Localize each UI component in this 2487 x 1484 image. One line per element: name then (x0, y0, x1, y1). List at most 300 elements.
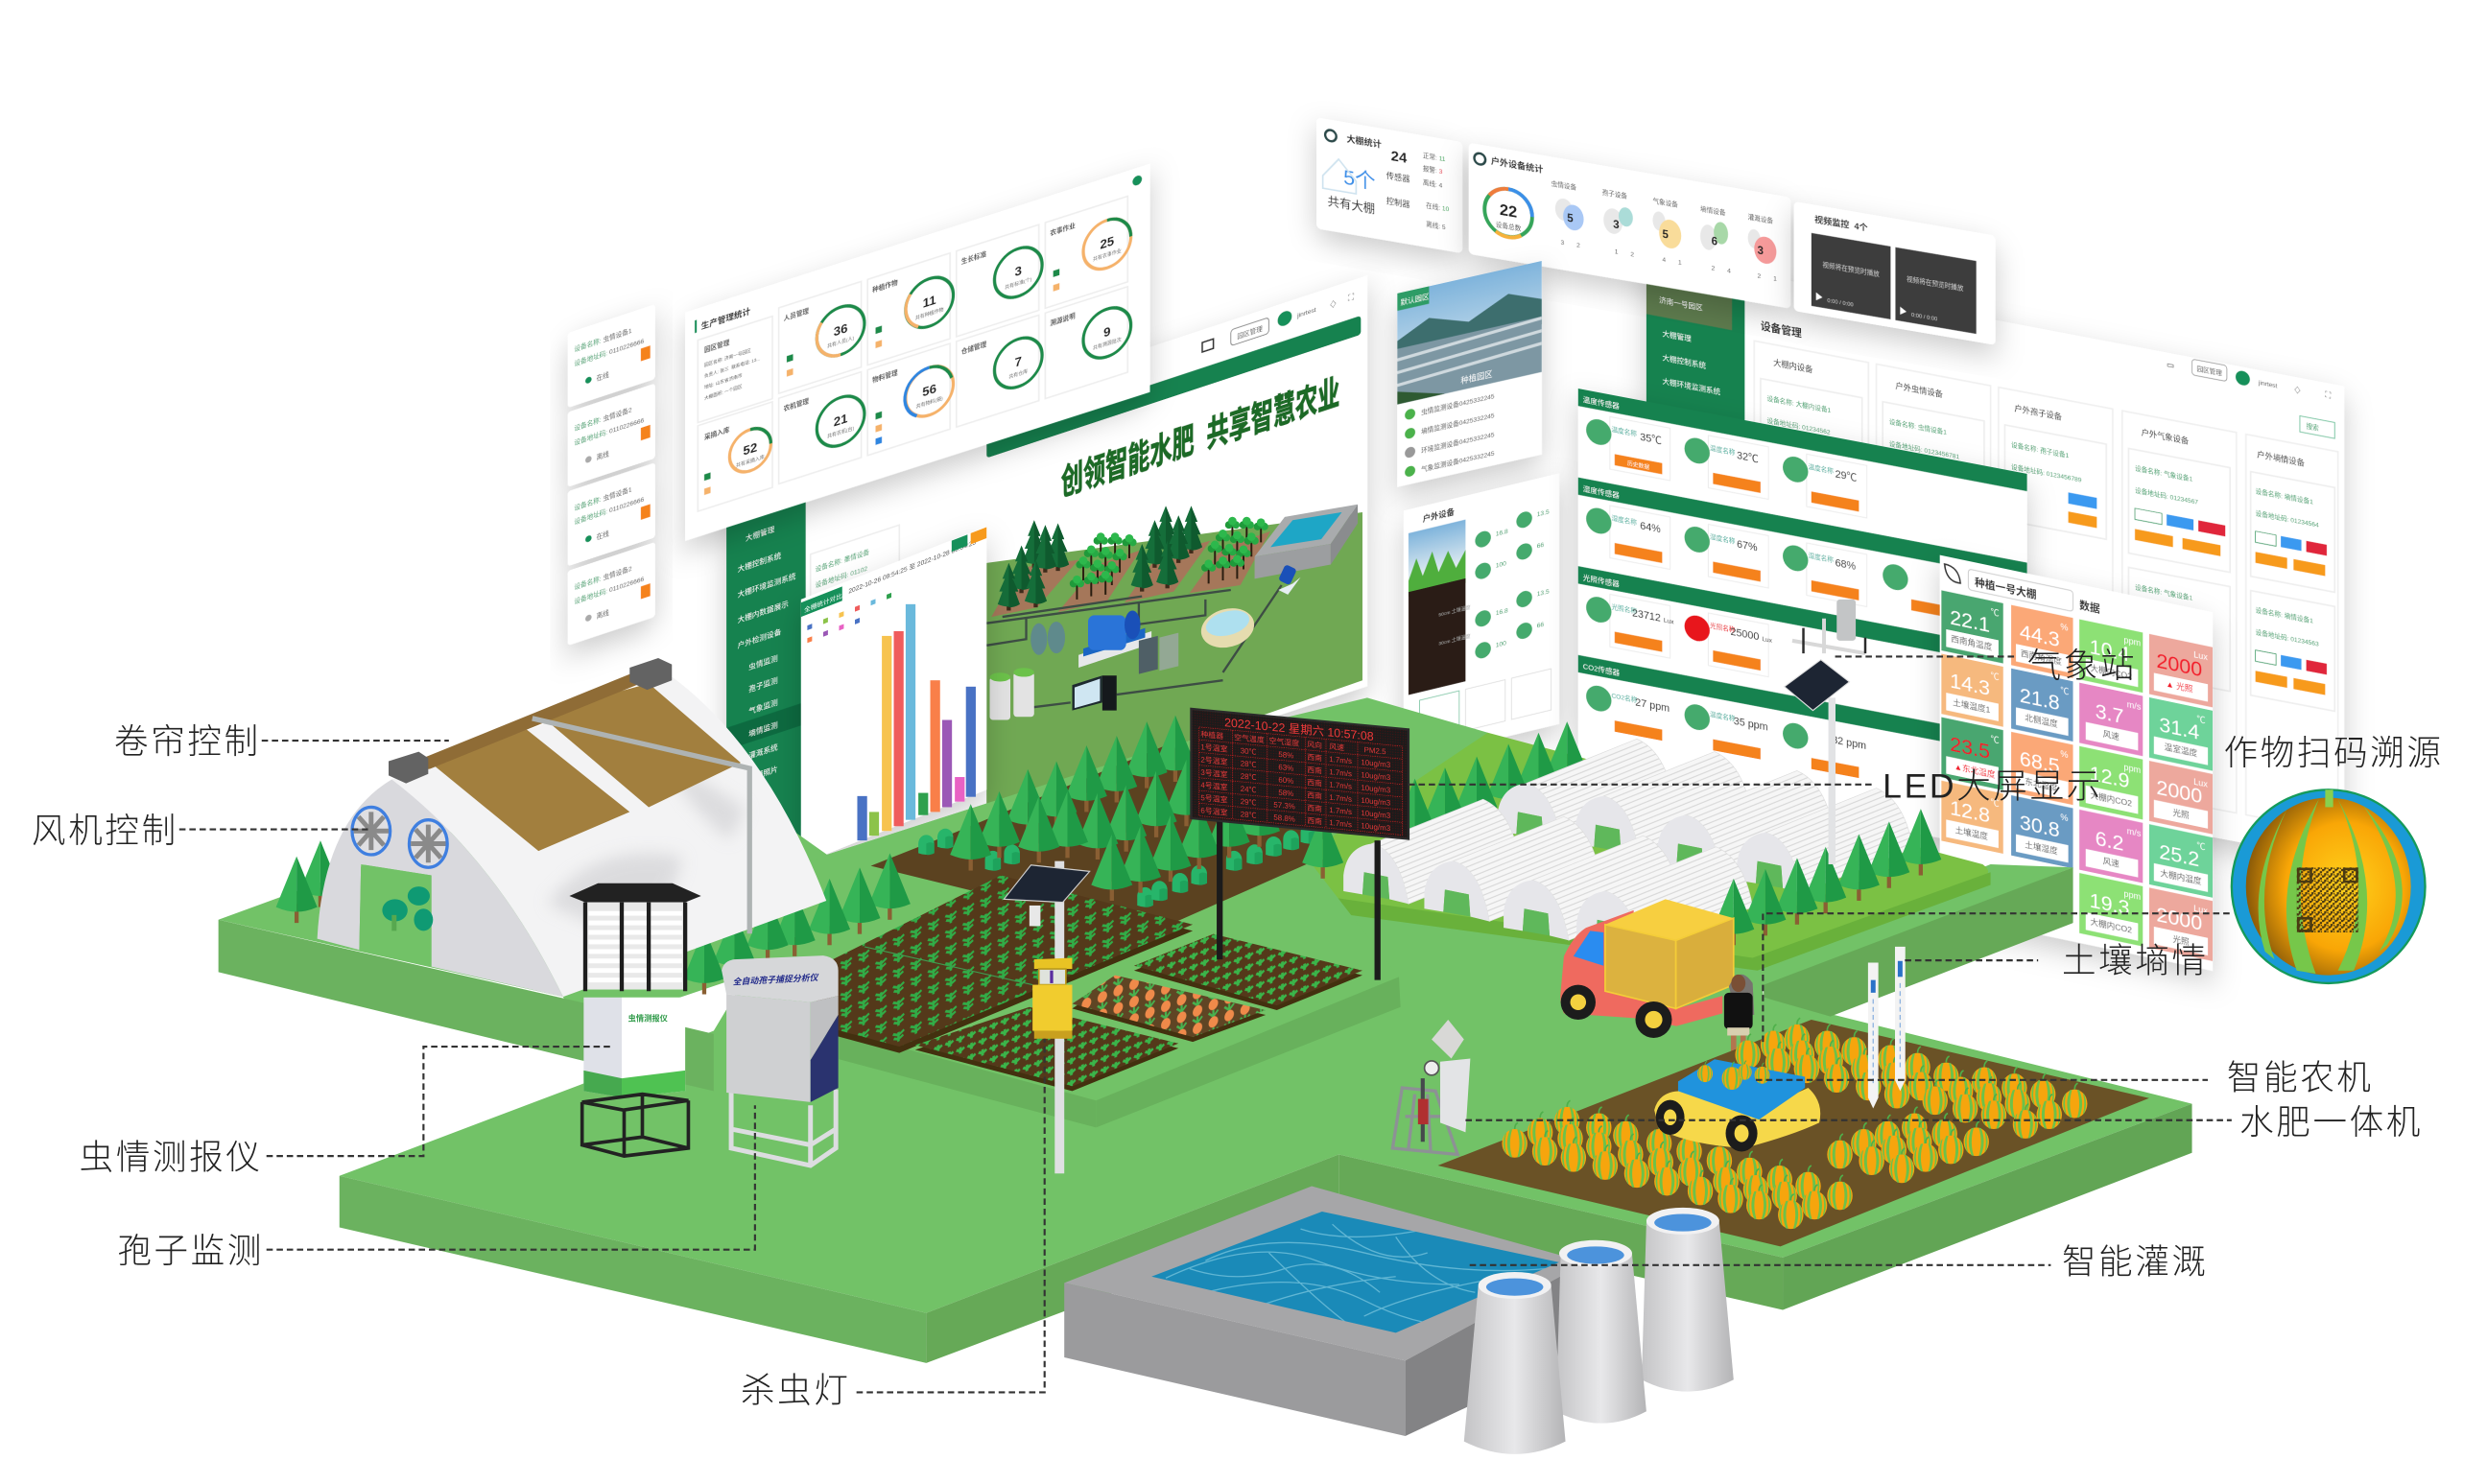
device bubbles: 2 (1630, 251, 1634, 258)
cell: 2000 alarm: ▲ 光照 (2166, 678, 2193, 695)
cell: 10.4: 大棚内CO2 (2090, 662, 2132, 681)
chart title: 2022-10-26 09:54:25 至 2022-10-28 09:54:25 (848, 538, 976, 596)
stat: sensors (1386, 145, 1450, 232)
tower left (1464, 1272, 1566, 1454)
cell: 6.2 (2079, 810, 2143, 883)
device bubbles: 6 (1712, 235, 1718, 248)
table text: 10ug/m3 (1361, 809, 1391, 820)
main motor (1078, 610, 1151, 668)
cell: 19.3 (2079, 873, 2143, 947)
toolbar: ♢ (2293, 385, 2302, 396)
panel: park photo (1397, 261, 1542, 487)
stat: 5 greenhouses: 共有大棚 (1328, 194, 1375, 216)
cell: 12.9: ppm (2123, 762, 2141, 775)
card: 采摘入库: 52 (744, 440, 757, 459)
cell: 68.5: % (2060, 749, 2068, 760)
section: CO2传感器 (1578, 655, 2027, 810)
cell: 25.2: 25.2 (2159, 839, 2199, 871)
section: 湿度传感器: 67% (1737, 538, 1758, 554)
toolbar (2167, 354, 2334, 438)
card: 采摘入库: 采摘入库 (704, 425, 730, 441)
truck (1560, 899, 1734, 1038)
sidebar: park navigation: 济南一号园区 (1659, 294, 1703, 313)
panel: greenhouse data grid (1940, 555, 2213, 971)
tree group: front row (683, 853, 911, 995)
cell: 25.2: ℃ (2196, 841, 2206, 852)
wheels (1561, 985, 1671, 1038)
table text: 西南 (1307, 815, 1322, 826)
water pool (1064, 1187, 1586, 1436)
platform: greenhouse base (219, 745, 841, 1091)
callout: LED大屏显示: LED大屏显示 (1883, 767, 2103, 806)
table text: 6号温室 (1200, 805, 1228, 817)
table text: 风速 (1329, 742, 1344, 752)
side face (811, 996, 839, 1060)
video players: 视频将在预览时播放 (1822, 260, 1880, 278)
column: 户外虫情设备: 户外虫情设备 (1895, 381, 1944, 399)
green sidebar: 气象监测 (748, 697, 778, 716)
green sidebar: 户外检测设备 (738, 626, 781, 650)
toolbar icons: 园区管理 (1237, 324, 1263, 341)
section: 湿度传感器: 68% (1836, 557, 1856, 573)
card: 虫情设备2 (568, 542, 655, 646)
section: 温度传感器 (1578, 389, 2027, 549)
table text: 4号温室 (1200, 780, 1228, 792)
bushes (918, 824, 1316, 907)
card: 仓储管理 (957, 314, 1042, 427)
card: 农机管理: 21 (834, 411, 848, 430)
cell: 30.8: 30.8 (2020, 810, 2060, 842)
device bubbles: 4 (1662, 256, 1666, 264)
curtain panels (435, 729, 629, 851)
card: 仓储管理: 共有仓库 (1008, 367, 1028, 381)
card: 物料管理: 物料管理 (872, 367, 898, 385)
panel: bar chart (801, 527, 986, 864)
table text: 29℃ (1241, 797, 1256, 808)
device bubbles: 2 (1758, 272, 1762, 280)
panel: outdoor soil device (1404, 473, 1559, 762)
section: CO2传感器: 32 ppm (1832, 734, 1866, 752)
sidebar: park navigation: 大棚环境监测系统 (1662, 376, 1720, 396)
sensor readings: 13.5 (1537, 509, 1550, 519)
card: 园区管理: 地址: 山东省济南市 (704, 372, 743, 390)
title: 户外设备: 户外设备 (1423, 506, 1455, 524)
field: rear right crops (1134, 934, 1362, 1010)
blue bed (1678, 1059, 1805, 1119)
device column: 设备名称: 墨情设备 (816, 548, 869, 574)
card: 虫情设备1 (568, 462, 655, 566)
cell: 3.7 (2079, 683, 2143, 756)
section: CO2传感器: CO2名称 (1612, 691, 1638, 704)
table text: 58% (1278, 789, 1293, 798)
sidebar: park navigation: 大棚管理 (1662, 328, 1692, 343)
cell: 10.4 (2079, 620, 2143, 693)
column: 户外气象设备: 设备名称: 气象设备1 (2135, 463, 2192, 483)
leafy trees (1070, 517, 1268, 600)
vegetable platform (817, 748, 1401, 1127)
concrete top (1064, 1187, 1586, 1360)
device list: 虫情监测设备0425332245 (1421, 391, 1495, 416)
ring: 22 devices: 22 (1500, 200, 1517, 222)
cell: 30.8 (2011, 795, 2073, 868)
fans (352, 807, 447, 867)
panel: outdoor device statistics (1469, 143, 1790, 309)
toolbar icons: ⛶ (1347, 292, 1354, 303)
cell: 12.8 (1941, 781, 2003, 854)
front arch (318, 780, 563, 997)
card: 农事作业 (1045, 195, 1131, 308)
column: 户外墒情设备: 设备名称: 墒情设备1 (2256, 486, 2313, 506)
card: 物料管理 (867, 342, 953, 456)
louvers (585, 903, 685, 991)
cell: 10.4: ppm (2123, 635, 2141, 648)
section: 湿度传感器: 湿度名称 (1808, 551, 1834, 564)
column: 大棚内设备: 设备地址码: 01234562 (1767, 416, 1831, 436)
insect lamp and solar panel (865, 861, 1090, 1173)
table text: PM2.5 (1364, 745, 1386, 756)
cell: 31.4: 温室温度 (2165, 742, 2197, 759)
roof (569, 883, 701, 903)
section: 湿度传感器: 湿度传感器 (1583, 483, 1620, 500)
stat: sensors: 控制器 (1386, 196, 1410, 210)
video players: 0:00 / 0:00 (1911, 313, 1937, 323)
table text: 10ug/m3 (1361, 758, 1391, 769)
title: 户外设备统计: 户外设备统计 (1491, 155, 1543, 175)
callout: 水肥一体机: 水肥一体机 (2239, 1103, 2423, 1142)
small tunnel greenhouses (1343, 739, 1913, 952)
cell: 23.5: 23.5 (1950, 732, 1990, 764)
table text: 西南 (1307, 803, 1322, 813)
cell: 3.7: 风速 (2103, 729, 2120, 742)
column: 户外气象设备: 户外气象设备 (2142, 428, 2190, 446)
cell: 12.8: ℃ (1991, 797, 2000, 809)
table text: 24℃ (1241, 785, 1256, 794)
cell: 22.1: ℃ (1991, 607, 2000, 619)
small pump (1278, 564, 1301, 595)
device bubbles: 孢子设备 (1602, 187, 1627, 200)
tree group: greenhouse left (276, 840, 341, 923)
column: 户外墒情设备: 户外墒情设备 (2257, 449, 2305, 468)
cell: 25.2: 大棚内温度 (2160, 867, 2202, 886)
panel: greenhouse statistics (1316, 117, 1462, 253)
caustics (1166, 1224, 1547, 1326)
device bubbles: 虫情设备 (1551, 178, 1576, 192)
tree group: behind tunnels (1394, 721, 1588, 845)
card: 园区管理: 园区管理 (704, 338, 730, 354)
yellow lamp (1032, 957, 1072, 1039)
cell: 44.3: % (2060, 622, 2068, 633)
card: 农事作业: 25 (1100, 234, 1115, 252)
card: 农机管理: 共有农机(台) (827, 425, 854, 440)
greenhouse body (391, 677, 826, 997)
platform: back wall level (1758, 864, 2073, 1017)
scene ground (986, 512, 1362, 812)
card: 生长标准: 共有标准(个) (1005, 276, 1032, 292)
board (1191, 709, 1409, 839)
table text: 30℃ (1241, 746, 1256, 757)
device bubbles: 4 (1727, 268, 1731, 275)
card: 仓储管理: 7 (1015, 354, 1022, 370)
panel: sensor data (1578, 389, 2027, 855)
slogan: 创领智能水肥 共享智慧农业 (1061, 372, 1339, 504)
column: 大棚内设备 (1754, 341, 1868, 743)
device bubbles: 5 (1662, 228, 1669, 242)
front face (726, 995, 811, 1102)
section: 光照传感器: 25000 Lux (1730, 626, 1773, 646)
fertigation machine (1392, 1020, 1470, 1154)
field: carrots (1072, 976, 1266, 1042)
section: 光照传感器: 光照传感器 (1583, 572, 1620, 589)
tower middle (1556, 1240, 1646, 1424)
monitor and pc (1072, 675, 1117, 711)
card: 虫情设备2: 设备名称: 虫情设备2 (574, 405, 632, 433)
card: 人员管理 (779, 280, 865, 393)
table text: 58% (1278, 750, 1293, 760)
sensor readings: 13.5 (1537, 588, 1550, 598)
green sidebar: 大棚管理 (746, 524, 775, 543)
cell: 44.3: 西南角湿度 (2021, 648, 2062, 667)
cell: 44.3 (2011, 605, 2073, 678)
LED display board (1191, 709, 1409, 980)
toolbar icons: jinrtest (1296, 307, 1316, 319)
card: 种植作物: 种植作物 (872, 277, 898, 294)
card: 物料管理: 共有物料(袋) (916, 395, 943, 411)
table text: 10ug/m3 (1361, 784, 1391, 795)
cab (1560, 910, 1722, 1026)
callout: 孢子监测 (117, 1105, 755, 1270)
section: 温度传感器: 温度名称 (1612, 425, 1637, 438)
cell: 19.3: 大棚内CO2 (2090, 916, 2132, 935)
column: 户外虫情设备 (1877, 364, 1991, 766)
wire (865, 947, 1032, 985)
water towers (1464, 1208, 1734, 1454)
sidebar: park navigation: 大棚控制系统 (1662, 352, 1706, 370)
stat: sensors: 离线: 5 (1426, 220, 1446, 231)
table text: 西南 (1307, 789, 1322, 801)
film shading (547, 762, 746, 935)
callout: 智能灌溉: 智能灌溉 (2062, 1242, 2209, 1281)
device bubbles: 3 (1758, 244, 1765, 258)
table text: 1.7m/s (1329, 806, 1352, 816)
selector: 种植一号大棚: 数据 (2079, 598, 2100, 615)
card: 生长标准 (957, 224, 1042, 337)
soil moisture probes (1868, 947, 1906, 1109)
cell: 22.1: 西南角温度 (1951, 633, 1993, 652)
cabinet (1440, 1058, 1470, 1132)
pole (1830, 697, 1835, 864)
panel: device management (1646, 254, 2344, 862)
cell: 2000 alarm (2149, 634, 2213, 707)
section: 温度传感器: 32℃ (1737, 450, 1759, 465)
spore analyzer (722, 955, 839, 1166)
green sidebar (726, 460, 806, 898)
door view (359, 864, 433, 967)
cell: 6.2: 6.2 (2096, 826, 2124, 856)
callout: 杀虫灯 (741, 1039, 1045, 1409)
curtain roller (428, 677, 639, 763)
cell: 10.4: 10.4 (2090, 634, 2129, 667)
table text: 2号温室 (1200, 754, 1228, 766)
table grid (1199, 727, 1402, 836)
stat: 5 greenhouses: 5个 (1343, 165, 1376, 194)
callout: 作物扫码溯源 (1763, 734, 2444, 1042)
motor boxes (389, 658, 672, 784)
toolbar: jinrtest (2258, 379, 2278, 389)
table text (1200, 729, 1391, 833)
cell: 30.8: % (2060, 813, 2068, 823)
card: 人员管理: 36 (834, 320, 848, 340)
cell: 2000: 2000 (2156, 775, 2202, 809)
image: soil profile: 50cm 土壤温度 (1438, 604, 1471, 619)
sensor readings (1475, 506, 1550, 660)
stat: sensors: 正常: 11 (1423, 151, 1446, 163)
fertilizer tanks (990, 668, 1034, 720)
cell: 2000 alarm: 2000 (2156, 648, 2202, 681)
melon flesh (2246, 798, 2411, 976)
section: 温度传感器: 29℃ (1836, 468, 1857, 484)
teal tanks (1030, 622, 1065, 655)
section: 温度传感器: 温度名称 (1808, 462, 1834, 476)
melon rind (2232, 789, 2426, 983)
device column: 设备名称: 墨情设备 (816, 617, 869, 644)
column: 户外气象设备 (2122, 411, 2237, 813)
device bubbles (1551, 178, 1777, 283)
cell: 21.8 (2011, 669, 2073, 742)
section: 湿度传感器: 64% (1640, 520, 1661, 535)
section: 湿度传感器: 湿度名称 (1710, 532, 1736, 546)
date line: 2022-10-22 星期六 10:57:08 (1224, 716, 1374, 743)
sidebar: park navigation (1646, 254, 1744, 479)
device column: 设备地址码: 01102 (816, 564, 867, 589)
device bubbles: 2 (1576, 242, 1580, 249)
callout: 卷帘控制: 卷帘控制 (114, 722, 261, 761)
cell: 14.3 (1941, 653, 2003, 727)
stat: sensors: 报警: 3 (1423, 164, 1443, 176)
table text: 1.7m/s (1329, 780, 1352, 791)
window (1574, 930, 1603, 966)
card: 物料管理: 56 (922, 381, 936, 399)
green sidebar: 灌溉系统 (748, 742, 778, 761)
callout: 作物扫码溯源: 作物扫码溯源 (2224, 734, 2444, 772)
cell: 2000 alarm: Lux (2193, 649, 2208, 663)
table text: 28℃ (1241, 772, 1256, 782)
callout: 土壤墒情: 土壤墒情 (2062, 941, 2209, 979)
cell: 31.4 (2149, 697, 2213, 771)
device column (811, 525, 899, 688)
green sidebar: 大棚控制系统 (738, 550, 781, 574)
cell: 2000 bottom: 光照 (2172, 933, 2190, 947)
device list (1405, 390, 1495, 478)
stat: sensors: 在线: 10 (1426, 200, 1450, 213)
card: 虫情设备1: 在线 (597, 529, 609, 541)
control cabinets (1139, 633, 1178, 674)
card: 采摘入库: 共有采摘入库 (736, 454, 765, 469)
table text: 风向 (1307, 740, 1322, 750)
table text: 西南 (1307, 777, 1322, 789)
farm robot (1654, 1059, 1820, 1151)
column: 户外虫情设备: 设备地址码: 0123456781 (1889, 439, 1959, 461)
section: 光照传感器: 23712 Lux (1632, 607, 1674, 627)
table text: 1.7m/s (1329, 767, 1352, 778)
wheels (1656, 1100, 1758, 1151)
panel: video surveillance (1794, 201, 1996, 345)
column: 户外气象设备: 设备地址码: 01234567 (2135, 485, 2198, 506)
card: 仓储管理: 仓储管理 (961, 340, 986, 356)
QR melon (2232, 789, 2426, 983)
photo: park greenhouses (1397, 261, 1542, 405)
toolbar icons (1202, 289, 1354, 355)
table text: 57.3% (1273, 800, 1295, 811)
card: 虫情设备2 (568, 384, 655, 487)
green sidebar: 虫情监测 (748, 652, 778, 671)
column: 户外虫情设备: 设备名称: 虫情设备1 (1889, 417, 1947, 436)
roller pipe (533, 718, 749, 933)
column: 户外孢子设备 (1999, 388, 2113, 789)
cell: 2000 bottom: Lux (2193, 904, 2208, 916)
table text: 3号温室 (1200, 767, 1228, 779)
device bubbles: 2 (1712, 265, 1716, 272)
cell: 2000: 光照 (2172, 807, 2190, 820)
close button (1132, 175, 1142, 187)
card: 虫情设备1: 设备名称: 虫情设备1 (574, 484, 632, 512)
column: 户外孢子设备: 设备地址码: 0123456789 (2011, 462, 2082, 484)
ring: 22 devices: 设备总数 (1496, 220, 1522, 233)
table text: 10ug/m3 (1361, 821, 1391, 833)
cell: 23.5: ▲东北温度 (1954, 761, 1996, 780)
card: 溯源说明: 9 (1103, 323, 1111, 340)
column: 户外孢子设备: 设备名称: 孢子设备1 (2011, 440, 2069, 459)
tower right (1642, 1208, 1734, 1392)
selector: 种植一号大棚: 种植一号大棚 (1975, 575, 2037, 601)
toolbar: 园区管理 (2196, 365, 2222, 378)
section: CO2传感器: 温度名称 (1710, 710, 1736, 723)
toolbar: ⛶ (2324, 389, 2331, 400)
sensor readings: 66 (1537, 622, 1544, 629)
card: 生长标准: 生长标准 (961, 249, 986, 266)
weather station (1785, 600, 1865, 864)
card: 虫情设备2: 离线 (597, 608, 609, 621)
sensor readings: 16.8 (1496, 529, 1508, 538)
card: 人员管理: 共有人员(人) (827, 335, 854, 350)
header bar (986, 316, 1361, 459)
cell: 19.3: ppm (2123, 889, 2141, 902)
water (1151, 1212, 1559, 1332)
device list: 气象监测设备0425332245 (1421, 449, 1495, 474)
column: 大棚内设备: 大棚内设备 (1773, 358, 1813, 375)
title: 大棚统计: 大棚统计 (1346, 133, 1382, 150)
device bubbles: 5 (1567, 212, 1574, 225)
column: 户外墒情设备 (2246, 435, 2338, 833)
cell: 44.3: 44.3 (2020, 620, 2060, 651)
device list: 墒情监测设备0425332245 (1421, 411, 1495, 436)
toolbar: ▭ (2167, 359, 2174, 370)
section: 湿度传感器 (1578, 478, 2027, 637)
stat: sensors: 传感器 (1386, 171, 1410, 184)
section: 湿度传感器: 湿度名称 (1612, 513, 1637, 527)
solar panel (1785, 660, 1849, 711)
photo: park greenhouses: 默认园区 (1401, 292, 1430, 307)
table text: 1.7m/s (1329, 755, 1352, 766)
device bubbles: 墒情设备 (1700, 204, 1726, 217)
cell: 14.3: ℃ (1991, 671, 2000, 682)
table text: 西南 (1307, 765, 1322, 775)
card: 虫情设备1 (568, 304, 655, 408)
pole (1054, 861, 1064, 1173)
stand (731, 1090, 836, 1166)
big greenhouse (318, 658, 826, 997)
melons front cluster (1502, 1100, 1853, 1229)
table text: 28℃ (1241, 759, 1256, 769)
